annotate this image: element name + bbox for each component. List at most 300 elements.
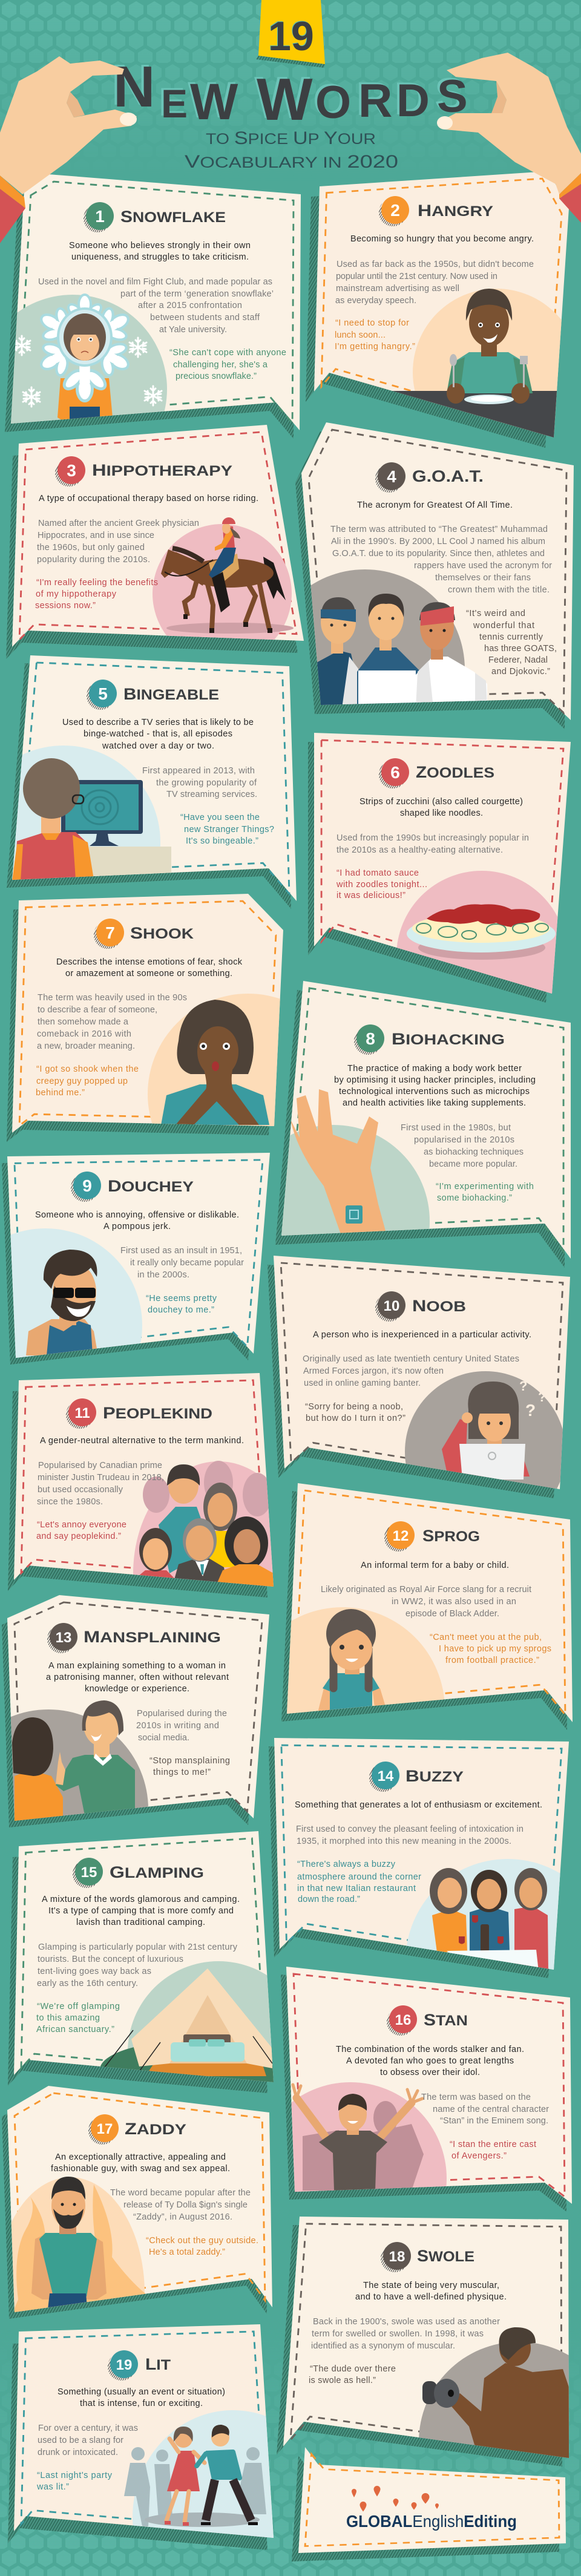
illustration: three tennis players: [311, 569, 487, 705]
body text: Glamping is particularly popular with 21st century: [38, 1942, 238, 1952]
body text: The word became popular after the: [110, 2188, 251, 2198]
dashed border: [321, 179, 562, 430]
body text: 2010s in writing and: [136, 1721, 219, 1731]
body text: G.O.A.T. due to its popularity. Since then, athletes and: [332, 549, 545, 559]
quote: [466, 609, 557, 677]
definition: a patronising manner, often without relevant: [46, 1673, 229, 1682]
quote: and Djokovic.”: [491, 667, 550, 677]
dashed border: [15, 1602, 262, 1814]
body text: the 1960s, but only gained: [37, 543, 145, 552]
right hand: [437, 53, 581, 223]
definition: to obsess over their idol.: [380, 2068, 480, 2077]
body text: The term was heavily used in the 90s: [38, 993, 187, 1003]
definition: A mixture of the words glamorous and camping.: [42, 1895, 240, 1904]
number badge: [94, 919, 124, 949]
quote: [36, 1064, 139, 1098]
body text: popular until the 21st century. Now used in: [336, 272, 497, 281]
quote: from football practice.”: [445, 1656, 539, 1665]
definition: [56, 957, 243, 978]
definition: and to have a well-defined physique.: [355, 2292, 507, 2302]
panel card: [314, 733, 571, 994]
body text: [335, 260, 534, 306]
number badge: 11: [74, 1405, 90, 1421]
definition: [334, 1064, 536, 1108]
panel: Global English Editing logo: [292, 2447, 566, 2561]
definition: shaped like noodles.: [400, 808, 483, 818]
definition: Something (usually an event or situation): [57, 2387, 225, 2397]
definition: binge-watched - that is, all episodes: [84, 729, 232, 739]
body text: in WW2, it was also used in an: [392, 1597, 516, 1607]
heading: HANGRY: [418, 202, 493, 220]
quote: “The dude over there: [310, 2364, 396, 2374]
illustration: dancing couple: [124, 2410, 333, 2576]
quote: [450, 2140, 536, 2161]
body text: [37, 519, 199, 565]
heading: New Words: W: [257, 66, 313, 133]
number badge: 2: [390, 201, 400, 220]
number badge: [73, 1858, 103, 1888]
illustration: person watching TV: [12, 746, 171, 880]
number badge: [387, 2005, 417, 2036]
quote: is swole as hell.”: [309, 2376, 376, 2385]
definition: An informal term for a baby or child.: [361, 1561, 509, 1570]
panel card: [287, 1483, 573, 1722]
dashed border: [18, 182, 294, 423]
quote: things to me!”: [153, 1768, 211, 1777]
definition: [355, 2281, 507, 2302]
definition: [42, 1895, 240, 1927]
panel card: [7, 2086, 272, 2312]
number badge: [384, 1521, 415, 1552]
right thumb nail: [437, 116, 453, 129]
heading: STAN: [424, 2011, 468, 2029]
panel shadow: [268, 1265, 564, 1498]
heading: New Words: S: [437, 71, 468, 122]
number badge: 9: [82, 1176, 92, 1195]
body text: [120, 1246, 244, 1280]
illustration: attractive man with flames: [11, 2177, 145, 2312]
heading: New Words: N: [113, 54, 155, 119]
body text: early as the 16th century.: [37, 1979, 138, 1988]
panel 19: Lit: [8, 2324, 274, 2550]
quote: douchey to me.”: [148, 1305, 214, 1315]
question marks: ?: [525, 1401, 536, 1420]
body text: [296, 1824, 524, 1846]
illustration: hand with microchip: [281, 1089, 430, 1236]
body text: a new, broader meaning.: [37, 1041, 135, 1051]
definition: [51, 2152, 230, 2174]
heading: BINGEABLE: [123, 685, 219, 703]
body text: in the 2000s.: [137, 1270, 189, 1280]
quote: [36, 2471, 113, 2492]
panel shadow: [5, 183, 295, 439]
definition: or amazement at someone or something.: [65, 969, 232, 978]
panel card: [14, 2324, 274, 2538]
yellow banner shadow: [256, 56, 325, 68]
panel 8: Biohacking: [275, 981, 571, 1268]
body text: For over a century, it was: [38, 2424, 138, 2433]
illustration: man talking to woman: [11, 1700, 148, 1821]
quote: new Stranger Things?: [184, 825, 274, 834]
definition: Someone who believes strongly in their own: [69, 241, 251, 251]
heading: NOOB: [412, 1297, 466, 1315]
quote: precious snowflake.”: [176, 372, 257, 381]
number badge: 8: [366, 1029, 375, 1048]
body text: crown them with the title.: [448, 585, 550, 595]
illustration: shocked woman: [148, 994, 280, 1126]
illustration: confused woman with laptop: [405, 1371, 563, 1489]
panel card: [14, 1373, 274, 1587]
definition: [35, 1210, 239, 1231]
panel shadow: [281, 1975, 566, 2212]
title block: [113, 0, 468, 172]
quote: “Stop mansplaining: [149, 1756, 230, 1766]
heading: ZOODLES: [416, 763, 494, 781]
quote: “I need to stop for: [335, 318, 409, 328]
body text: tourists. But the concept of luxurious: [38, 1955, 183, 1964]
body text: as everyday speech.: [335, 296, 416, 306]
background pattern bottom: [0, 2468, 581, 2576]
body text: at Yale university.: [159, 325, 227, 335]
body text: as biohacking techniques: [424, 1147, 524, 1157]
body text: TV streaming services.: [166, 790, 257, 799]
number badge: [55, 456, 85, 487]
body text: themselves or their fans: [435, 573, 531, 583]
left hand shape: [0, 56, 137, 194]
definition: A devoted fan who goes to great lengths: [346, 2056, 514, 2066]
panel shadow: [7, 663, 291, 909]
number badge: [369, 1762, 399, 1792]
quote: African sanctuary.”: [36, 2025, 114, 2034]
body text: [38, 2424, 138, 2457]
body text: popularity during the 2010s.: [37, 555, 150, 565]
definition: The acronym for Greatest Of All Time.: [357, 500, 513, 510]
definition: and health activities like taking supplements.: [343, 1098, 526, 1108]
panel card: [11, 174, 301, 430]
quote: [335, 318, 415, 352]
quote: [336, 868, 427, 900]
quote: [180, 813, 274, 846]
dashed border: [321, 740, 563, 986]
definition: Something that generates a lot of enthusiasm or excitement.: [295, 1800, 542, 1810]
quote: it was delicious!”: [336, 891, 405, 900]
heading: New Words: R: [358, 74, 392, 127]
illustration: cheering fan: [292, 2082, 447, 2192]
definition: An exceptionally attractive, appealing and: [55, 2152, 226, 2162]
quote: some biohacking.”: [437, 1193, 512, 1203]
number badge: [84, 202, 114, 232]
body text: release of Ty Dolla $ign's single: [123, 2200, 248, 2210]
quote: It's so bingeable.”: [186, 836, 258, 846]
quote: challenging her, she's a: [173, 360, 268, 370]
panel 16: Stan: [281, 1967, 572, 2212]
quote: “Last night's party: [37, 2471, 113, 2480]
body text: part of the term ‘generation snowflake’: [120, 289, 274, 299]
number badge: [71, 1172, 101, 1202]
illustration: glamping tent: [100, 1961, 274, 2082]
quote: [169, 348, 286, 381]
dashed border: [19, 901, 276, 1126]
body text: popularised in the 2010s: [414, 1135, 514, 1145]
icon: location pins: [352, 2486, 439, 2511]
definition: A person who is inexperienced in a particular activity.: [313, 1330, 531, 1340]
panel shadow: [7, 903, 278, 1142]
illustration: woman in snowflake: [11, 293, 167, 424]
illustration: man with sunglasses: [11, 1228, 142, 1358]
body text: since the 1980s.: [37, 1497, 103, 1507]
quote: [35, 578, 158, 611]
body text: the 2010s as a healthy-eating alternative.: [336, 845, 503, 855]
quote: “Let's annoy everyone: [37, 1520, 126, 1530]
number badge: [381, 2242, 411, 2272]
quote: atmosphere around the corner: [297, 1872, 421, 1882]
body text: [311, 2317, 500, 2351]
number badge: [108, 2350, 138, 2381]
left hand: [0, 56, 137, 243]
number badge: [47, 1623, 77, 1653]
number badge: 3: [67, 461, 76, 480]
illustration: smiling girl: [287, 1607, 444, 1714]
dashed border: [21, 2332, 266, 2531]
body text: after a 2015 confrontation: [138, 301, 242, 310]
heading: BIOHACKING: [392, 1030, 505, 1048]
dashed border: [281, 1263, 563, 1482]
quote: “Check out the guy outside.: [146, 2236, 258, 2246]
panel shadow: [308, 742, 565, 1003]
body text: [37, 1461, 164, 1507]
body text: [401, 1123, 524, 1169]
panel 17: Zaddy: [2, 2086, 272, 2319]
quote: with zoodles tonight...: [336, 880, 427, 890]
quote: “I'm really feeling the benefits: [36, 578, 158, 588]
definition: The state of being very muscular,: [363, 2281, 499, 2290]
quote: “I'm experimenting with: [436, 1182, 534, 1191]
panel shadow: [2, 2093, 267, 2319]
definition: lavish than traditional camping.: [76, 1918, 205, 1927]
quote: wonderful that: [473, 621, 534, 631]
body text: The term was based on the: [421, 2093, 531, 2102]
panel shadow: [277, 2225, 562, 2466]
panel 14: Buzzy: [269, 1738, 569, 1978]
quote: “There's always a buzzy: [297, 1860, 396, 1869]
quote: Federer, Nadal: [488, 655, 548, 665]
heading: DOUCHEY: [108, 1177, 194, 1195]
question marks: ?: [538, 1389, 546, 1404]
definition: [62, 718, 254, 751]
panel card: [314, 171, 569, 438]
left thumb nail: [120, 113, 137, 126]
body text: minister Justin Trudeau in 2018,: [38, 1473, 164, 1483]
number badge: 15: [81, 1864, 97, 1881]
number badge: 5: [98, 684, 108, 703]
quote: behind me.”: [36, 1088, 85, 1098]
body text: Armed Forces jargon, it's now often: [303, 1366, 444, 1376]
number badge: 19: [116, 2357, 132, 2373]
definition: uniqueness, and struggles to take criticism.: [71, 252, 249, 262]
quote: of Avengers.”: [451, 2151, 507, 2161]
body text: “Zaddy”, in August 2016.: [133, 2212, 232, 2222]
body text: [37, 993, 187, 1051]
quote: I'm getting hangry.”: [335, 342, 415, 352]
quote: [309, 2364, 396, 2385]
number badge: 10: [384, 1298, 399, 1314]
body text: [38, 277, 274, 335]
heading: New Words: O: [315, 77, 351, 128]
number badge: [66, 1398, 96, 1429]
definition: [336, 2045, 524, 2077]
body text: name of the central character: [433, 2105, 549, 2114]
body text: Used from the 1990s but increasingly popular in: [336, 833, 529, 843]
panel 9: Douchey: [2, 1153, 270, 1365]
illustration: plate of zoodles: [397, 871, 558, 994]
quote: “He seems pretty: [146, 1294, 217, 1303]
quote: tennis currently: [479, 632, 543, 642]
body text: rappers have used the acronym for: [414, 561, 552, 571]
panel card: [283, 2217, 569, 2458]
panel 11: Peoplekind: [8, 1373, 274, 1598]
quote: [149, 1756, 230, 1777]
dashed border: [281, 1745, 562, 1962]
number badge: [375, 1291, 405, 1322]
right cuff: [559, 173, 581, 198]
definition: Describes the intense emotions of fear, shock: [56, 957, 243, 967]
body text: Originally used as late twentieth century United States: [303, 1354, 519, 1364]
panel shadow: [281, 1491, 567, 1730]
number badge: 7: [105, 923, 115, 942]
quote: He's a total zaddy.”: [149, 2247, 225, 2257]
panel 6: Zoodles: [308, 733, 571, 1003]
body text: term for swelled or swollen. In 1998, it was: [312, 2329, 484, 2339]
dashed border: [15, 1160, 263, 1351]
question marks: ?: [519, 1378, 527, 1394]
quote: [305, 1402, 405, 1423]
panel card: [12, 894, 283, 1133]
body text: [421, 2093, 549, 2126]
definition: The combination of the words stalker and fan.: [336, 2045, 524, 2054]
body text: [330, 525, 552, 595]
panel shadow: [269, 1746, 563, 1978]
body text: Likely originated as Royal Air Force slang for a recruit: [321, 1585, 531, 1594]
number badge: [87, 680, 117, 710]
number badge: 17: [97, 2121, 113, 2137]
panel 13: Mansplaining: [2, 1595, 269, 1827]
quote: [146, 1294, 217, 1315]
definition: Used to describe a TV series that is likely to be: [62, 718, 254, 727]
heading: PEOPLEKIND: [103, 1404, 212, 1422]
definition: technological interventions such as microchips: [339, 1087, 530, 1096]
quote: “Can't meet you at the pub,: [430, 1633, 542, 1642]
body text: it really only became popular: [130, 1258, 244, 1268]
body text: tent-living goes way back as: [38, 1967, 151, 1976]
logo panel card: [298, 2447, 566, 2553]
body text: Used in the novel and film Fight Club, and made popular as: [38, 277, 272, 287]
quote: “It's weird and: [466, 609, 525, 618]
body text: became more popular.: [429, 1159, 517, 1169]
dashed border: [290, 2224, 562, 2451]
definition: [46, 1661, 229, 1694]
panel 7: Shook: [7, 894, 283, 1142]
body text: to describe a fear of someone,: [38, 1005, 157, 1015]
panel shadow: [8, 1842, 268, 2093]
body text: but used occasionally: [38, 1485, 123, 1495]
heading: New Words: D: [396, 75, 430, 126]
body text: then somehow made a: [38, 1017, 129, 1027]
definition: that is intense, fun or exciting.: [80, 2399, 203, 2408]
panel shadow: [275, 990, 565, 1268]
definition: fashionable guy, with swag and sex appeal.: [51, 2164, 230, 2174]
heading: LIT: [145, 2355, 171, 2373]
definition: [69, 241, 251, 262]
body text: [142, 766, 257, 799]
right hand shading: [491, 81, 507, 113]
definition: Becoming so hungry that you become angry.: [350, 234, 534, 244]
illustration: hungry man at table: [392, 289, 562, 438]
quote: of my hippotherapy: [36, 589, 117, 599]
definition: Someone who is annoying, offensive or dislikable.: [35, 1210, 239, 1220]
panel 12: Sprog: [281, 1483, 573, 1730]
definition: A gender-neutral alternative to the term mankind.: [40, 1436, 244, 1446]
definition: [57, 2387, 225, 2408]
quote: in that new Italian restaurant: [297, 1884, 416, 1893]
definition: A man explaining something to a woman in: [48, 1661, 226, 1671]
quote: creepy guy popped up: [36, 1077, 128, 1086]
quote: “Have you seen the: [180, 813, 260, 822]
question marks: [519, 1378, 546, 1420]
definition: by optimising it using hacker principles, including: [334, 1075, 536, 1085]
heading: HIPPOTHERAPY: [92, 461, 232, 479]
body text: mainstream advertising as well: [336, 284, 459, 293]
panel card: [281, 981, 571, 1259]
panel 3: Hippotherapy: [6, 425, 304, 663]
panel card: [7, 1595, 269, 1821]
definition: [359, 797, 523, 818]
body text: 1935, it morphed into this new meaning in the 2000s.: [297, 1837, 511, 1846]
number badge: 12: [393, 1528, 409, 1544]
quote: “We're off glamping: [37, 2002, 120, 2011]
body text: used in online gaming banter.: [304, 1378, 421, 1388]
quote: [430, 1633, 551, 1665]
heading: SNOWFLAKE: [120, 208, 226, 226]
panel 5: Bingeable: [7, 655, 297, 909]
quote: “She can't cope with anyone: [169, 348, 286, 358]
number badge: [88, 2114, 119, 2145]
dashed border: [294, 1490, 565, 1715]
body text: Named after the ancient Greek physician: [38, 519, 199, 528]
right hand shape: [437, 53, 581, 194]
quote: I have to pick up my sprogs: [439, 1644, 551, 1654]
panel 18: Swole: [277, 2217, 569, 2466]
heading: New Words: E: [161, 81, 188, 126]
panel card: [274, 1738, 569, 1970]
panel card: [14, 1831, 274, 2082]
body text: First used as an insult in 1951,: [120, 1246, 242, 1256]
dashed border: [294, 1974, 565, 2197]
heading: SWOLE: [417, 2247, 474, 2265]
panel card: [301, 422, 574, 720]
quote: [146, 2236, 258, 2257]
number badge: [354, 1024, 384, 1055]
panel 15: Glamping: [8, 1831, 274, 2093]
subtitle: TO SPICE UP YOUR: [206, 128, 376, 148]
panel card: [274, 1256, 570, 1489]
heading: SPROG: [422, 1527, 480, 1545]
number badge: [375, 462, 405, 493]
quote: sessions now.”: [35, 601, 96, 611]
body text: The term was attributed to “The Greatest” Muhammad: [330, 525, 548, 534]
number badge: 1: [95, 207, 105, 226]
number badge: 16: [395, 2012, 411, 2028]
heading: New Words: W: [190, 73, 238, 130]
